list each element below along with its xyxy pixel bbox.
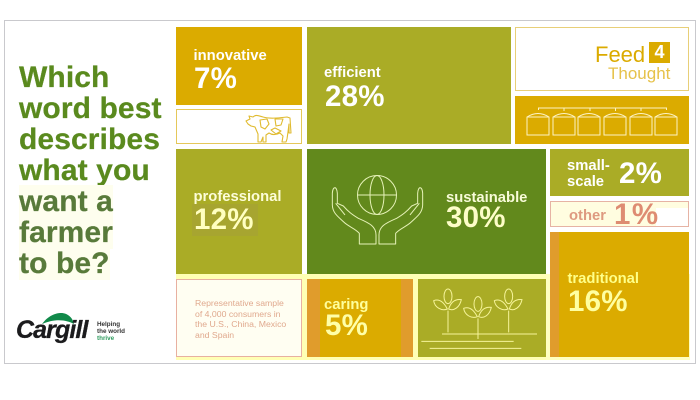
label: sustainable [446, 190, 527, 206]
left shade [307, 279, 320, 357]
icon: plants [421, 288, 537, 349]
value: 30% [446, 201, 506, 234]
right shade [401, 279, 413, 357]
panel: small-scale [550, 149, 689, 196]
panel: innovative [176, 27, 302, 105]
sample text: the U.S., China, Mexico [195, 319, 286, 329]
pale tint behind lower panels [176, 274, 547, 360]
title: describes [19, 123, 160, 156]
title [18, 61, 162, 280]
label: scale [567, 174, 604, 190]
logo badge: 4: 4 [654, 42, 664, 62]
logo word: Thought: Thought [608, 64, 670, 83]
panel: Feed4Thought logo [515, 27, 689, 91]
logo badge: 4 [649, 42, 670, 63]
panel: sustainable [307, 149, 546, 274]
logo tagline [97, 321, 125, 342]
logo tagline: Helping [97, 321, 120, 328]
icon: silos [526, 108, 678, 136]
value: 16% [568, 285, 628, 318]
sample text: Representative sample [195, 298, 284, 308]
label: caring [324, 297, 368, 313]
logo tagline: thrive [97, 335, 114, 342]
label: innovative [194, 48, 267, 64]
icon: cow [245, 114, 292, 142]
value: 2% [619, 157, 662, 190]
panel: efficient [307, 27, 511, 144]
logo: Cargill [16, 313, 125, 344]
title: want a [19, 185, 113, 218]
panel: plants [418, 279, 546, 357]
icon: hands holding globe [332, 175, 424, 244]
logo leaf [42, 313, 74, 324]
title: farmer [19, 216, 113, 249]
logo wordmark: Cargill [16, 316, 88, 344]
sample text [195, 298, 286, 340]
title: Which [19, 61, 110, 94]
title: what you [19, 154, 150, 187]
label: small- [567, 158, 610, 174]
text backing [192, 204, 258, 236]
label [567, 158, 610, 190]
left shade [550, 232, 559, 357]
value: 12% [194, 203, 254, 236]
label: efficient [324, 65, 381, 81]
panel: cow icon [176, 109, 302, 144]
value: 5% [325, 309, 368, 342]
panel: silos [515, 96, 689, 144]
value: 1% [614, 198, 660, 231]
value: 7% [194, 62, 237, 95]
label: professional [194, 189, 281, 205]
logo word: Feed: Feed [595, 42, 645, 67]
title: to be? [19, 247, 110, 280]
panel: professional [176, 149, 302, 274]
panel: other [550, 201, 689, 227]
title: word best [19, 92, 162, 125]
sample text: and Spain [195, 330, 234, 340]
pale tint behind lower right panel [546, 274, 690, 360]
value: 28% [325, 80, 385, 113]
label: traditional [568, 271, 639, 287]
panel: caring [307, 279, 413, 357]
sample text: of 4,000 consumers in [195, 309, 280, 319]
white patch [656, 208, 688, 226]
label: other [569, 208, 606, 224]
panel: traditional [550, 232, 689, 357]
panel: sample note [176, 279, 302, 357]
logo tagline: the world [97, 328, 125, 335]
